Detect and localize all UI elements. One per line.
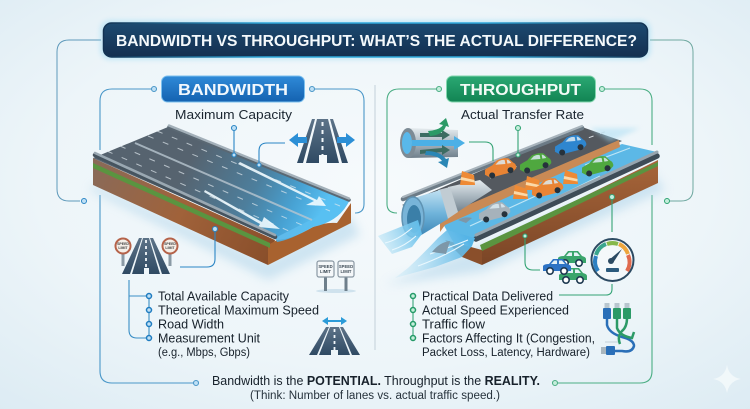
water cascades: [378, 220, 422, 254]
throughput feature list: Actual Speed Experienced: [422, 304, 569, 318]
icon: speed limit signs: LIMIT: [341, 269, 352, 274]
bandwidth feature list: [129, 280, 319, 359]
icon: pipe with diverging arrows: [400, 118, 465, 168]
throughput feature list: Traffic flow: [422, 318, 486, 332]
bandwidth feature list: Measurement Unit: [158, 332, 261, 346]
icon: network cables: [601, 303, 634, 355]
rocks: [432, 217, 472, 254]
throughput feature list: Practical Data Delivered: [422, 290, 553, 304]
throughput feature list: [410, 290, 595, 359]
road rails: [95, 126, 349, 237]
icon: speed limit signs: SPEED: [318, 264, 333, 269]
bandwidth feature list: (e.g., Mbps, Gbps): [158, 347, 250, 359]
title banner: BANDWIDTH VS THROUGHPUT: WHAT’S THE ACTUAL DIFFERENCE?: [116, 33, 637, 50]
throughput subtitle: Actual Transfer Rate: [461, 107, 584, 122]
throughput heading pill: THROUGHPUT: [460, 82, 581, 99]
road asphalt lane: [402, 127, 622, 218]
road surface: [93, 127, 350, 238]
icon: road with speed limit signs: [116, 238, 178, 274]
summary note: (Think: Number of lanes vs. actual traffic speed.): [250, 390, 500, 402]
orange divider: [440, 140, 620, 232]
road rails: [403, 126, 657, 239]
icon: speed limit signs: LIMIT: [320, 269, 331, 274]
connectors: title to panels: [57, 40, 693, 204]
bandwidth feature list: Road Width: [158, 318, 224, 332]
bandwidth heading pill: BANDWIDTH: [178, 82, 288, 99]
icon: road with width arrows: [289, 119, 355, 163]
icon: road with speed limit signs: SPEED: [117, 242, 129, 246]
road lane markings: [107, 131, 340, 231]
icon: speedometer: [592, 239, 634, 281]
throughput road illustration: [378, 126, 665, 285]
road shadow: [385, 170, 665, 285]
bandwidth heading pill: [162, 76, 304, 102]
throughput feature list: Factors Affecting It (Congestion,: [422, 332, 595, 346]
throughput heading pill: [446, 76, 596, 102]
pipe: [402, 180, 492, 237]
icon: road with speed limit signs: LIMIT: [118, 246, 128, 250]
bandwidth road illustration: [90, 126, 360, 280]
bandwidth subtitle: Maximum Capacity: [175, 107, 293, 122]
center divider: [374, 85, 376, 350]
road shadow: [90, 185, 360, 280]
icon: three cars: [543, 251, 587, 283]
icon: speed limit signs: SPEED: [339, 264, 353, 269]
icon: road with speed limit signs: LIMIT: [165, 246, 175, 250]
icon: speed limit signs: [316, 261, 356, 293]
icon: road with speed limit signs: SPEED: [164, 242, 176, 246]
callout leaders: bandwidth road: [180, 126, 285, 267]
title banner: [100, 20, 651, 60]
water lane: [442, 144, 657, 245]
icon: road width: [309, 317, 360, 355]
bandwidth feature list: Theoretical Maximum Speed: [158, 304, 319, 318]
callout leaders: throughput road: [469, 126, 614, 295]
fading road end: [590, 128, 640, 142]
summary line: Bandwidth is the POTENTIAL. Throughput is the REALITY.: [212, 373, 540, 388]
throughput feature list: Packet Loss, Latency, Hardware): [422, 347, 590, 359]
sparkle mark: [713, 365, 741, 393]
road soil sides: [93, 158, 275, 265]
road flow arrows: [204, 162, 326, 229]
bandwidth feature list: Total Available Capacity: [158, 290, 290, 304]
bandwidth outer connectors: [100, 86, 364, 386]
cars and barriers: [460, 171, 475, 185]
throughput outer connectors: [387, 86, 652, 386]
road soil sides: [445, 240, 482, 265]
